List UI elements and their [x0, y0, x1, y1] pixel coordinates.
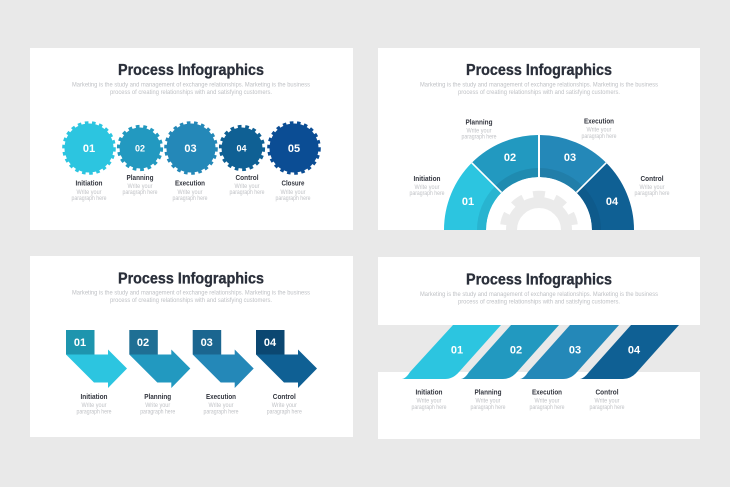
segment 03: 03 — [564, 152, 576, 164]
title: arrows panel: Process Infographics — [118, 270, 264, 287]
label: initiation: Write your — [414, 184, 440, 191]
label: control: paragraph here — [590, 404, 625, 411]
label: initiation — [412, 388, 447, 411]
label: execution: Write your — [178, 189, 203, 196]
panel: semicircle — [378, 48, 700, 230]
description: parallelograms panel — [420, 291, 659, 306]
label: initiation: Initiation — [80, 392, 108, 401]
label: planning — [122, 173, 158, 196]
segment 03 — [540, 135, 606, 192]
label: control — [634, 174, 670, 197]
label: planning: paragraph here — [470, 404, 506, 411]
arrow 02: 02 — [137, 337, 149, 349]
parallelogram 04: 04 — [628, 344, 641, 356]
gear 03 — [166, 123, 216, 173]
label: initiation: paragraph here — [72, 195, 107, 202]
description: semicircle panel — [420, 82, 659, 96]
arrow 02 — [129, 330, 190, 388]
label: closure: Closure — [282, 179, 304, 188]
label: planning: paragraph here — [140, 408, 176, 415]
label: initiation: Write your — [416, 398, 442, 405]
title: semicircle panel: Process Infographics — [466, 62, 612, 79]
label: initiation: paragraph here — [76, 408, 112, 415]
label: initiation: Initiation — [76, 179, 102, 188]
label: initiation: Write your — [76, 189, 102, 196]
gear 02 — [118, 126, 162, 170]
label: control: paragraph here — [230, 189, 265, 196]
segment 02 — [472, 135, 538, 192]
arrow 03: 03 — [201, 337, 213, 349]
grey band — [378, 325, 700, 372]
parallelogram 03: 03 — [569, 344, 581, 356]
label: control: paragraph here — [267, 408, 302, 415]
description: parallelograms panel: process of creating relationships with and satisfying customers. — [458, 298, 620, 306]
segment 01 — [444, 163, 502, 230]
segment 01: 01 — [462, 196, 474, 208]
label: control — [590, 388, 625, 411]
title: parallelograms panel: Process Infographics — [466, 272, 612, 289]
description: semicircle panel: process of creating relationships with and satisfying customers. — [458, 89, 620, 96]
arrow 01 — [66, 330, 127, 388]
arrow 03 — [193, 330, 254, 388]
label: initiation: Initiation — [414, 174, 440, 183]
description: arrows panel: Marketing is the study and management of exchange relationships. Marketing is the business — [72, 289, 311, 296]
label: initiation — [410, 174, 445, 197]
label: execution: paragraph here — [582, 133, 617, 140]
label: control: Write your — [234, 183, 260, 190]
gear 04: 04 — [236, 143, 247, 153]
gear 04 — [220, 126, 264, 170]
parallelogram 02 — [461, 325, 559, 379]
label: execution: Write your — [586, 127, 612, 134]
label: control: Control — [273, 392, 296, 401]
label: control — [267, 392, 302, 415]
label: execution: Write your — [208, 402, 234, 409]
label: execution: paragraph here — [172, 195, 208, 202]
label: closure: Write your — [280, 189, 306, 196]
arrow 01: 01 — [74, 337, 86, 349]
gear 02: 02 — [135, 143, 145, 153]
label: planning — [462, 117, 497, 140]
label: initiation: Write your — [82, 402, 107, 409]
segment 04: 04 — [606, 196, 619, 208]
description: gears panel: Marketing is the study and management of exchange relationships. Marketing is the business — [72, 82, 311, 88]
description: arrows panel — [72, 289, 311, 304]
label: control: Control — [236, 173, 258, 182]
label: execution: Execution — [175, 179, 205, 188]
label: initiation: paragraph here — [410, 190, 445, 197]
label: planning: Planning — [144, 392, 171, 401]
gear 03: 03 — [184, 143, 197, 155]
label: planning: Write your — [466, 127, 492, 134]
label: initiation: Initiation — [416, 388, 442, 397]
label: planning — [470, 388, 506, 411]
icon: grey gear — [500, 190, 578, 230]
label: planning: Write your — [476, 398, 501, 405]
arrow 04 — [256, 330, 317, 388]
label: execution: Execution — [206, 392, 236, 401]
label: execution — [172, 179, 208, 202]
panel: gears — [30, 48, 353, 230]
label: planning: Write your — [128, 183, 153, 190]
label: initiation — [76, 392, 112, 415]
parallelogram 03 — [520, 325, 619, 379]
label: control: Control — [640, 174, 664, 183]
arrow 04: 04 — [264, 337, 277, 349]
label: closure: paragraph here — [276, 195, 311, 202]
label: execution — [582, 117, 617, 140]
label: control: Write your — [640, 184, 665, 191]
label: initiation: paragraph here — [412, 404, 447, 411]
label: execution: paragraph here — [530, 404, 565, 411]
label: execution: Execution — [532, 388, 562, 397]
label: control: Write your — [594, 398, 620, 405]
description: gears panel — [72, 82, 311, 96]
panel: parallelograms — [378, 257, 700, 439]
label: closure — [276, 179, 311, 202]
label: planning: Planning — [474, 388, 502, 397]
parallelogram 02: 02 — [510, 344, 522, 356]
gear 01: 01 — [83, 143, 95, 155]
segment 04 — [576, 163, 634, 230]
label: execution — [530, 388, 565, 411]
label: initiation — [72, 179, 107, 202]
label: execution: Execution — [584, 117, 614, 126]
description: semicircle panel: Marketing is the study and management of exchange relationships. Marketing is the business — [420, 82, 659, 88]
gear 05: 05 — [288, 143, 300, 155]
description: arrows panel: process of creating relationships with and satisfying customers. — [110, 297, 272, 304]
parallelogram 01: 01 — [451, 344, 463, 356]
label: execution — [204, 392, 239, 415]
label: control: paragraph here — [634, 190, 670, 197]
label: execution: Write your — [534, 398, 560, 405]
segment 02: 02 — [504, 152, 516, 164]
label: planning: Planning — [126, 173, 154, 182]
parallelogram 01 — [402, 325, 501, 379]
label: control: Write your — [272, 402, 298, 409]
label: execution: paragraph here — [204, 408, 239, 415]
label: control: Control — [596, 388, 618, 397]
label: control — [230, 173, 265, 196]
description: gears panel: process of creating relationships with and satisfying customers. — [110, 89, 272, 96]
title: gears panel: Process Infographics — [118, 62, 264, 79]
label: planning: Planning — [466, 117, 492, 126]
gear 05 — [269, 123, 319, 173]
label: planning: paragraph here — [462, 134, 497, 140]
parallelogram 04 — [580, 325, 679, 379]
panel: arrows — [30, 256, 353, 437]
description: parallelograms panel: Marketing is the study and management of exchange relationships. Marketing is the business — [420, 291, 659, 298]
separators — [472, 163, 606, 192]
label: planning: Write your — [145, 402, 171, 409]
label: planning: paragraph here — [122, 189, 158, 196]
gear 01 — [64, 123, 114, 173]
label: planning — [140, 392, 176, 415]
